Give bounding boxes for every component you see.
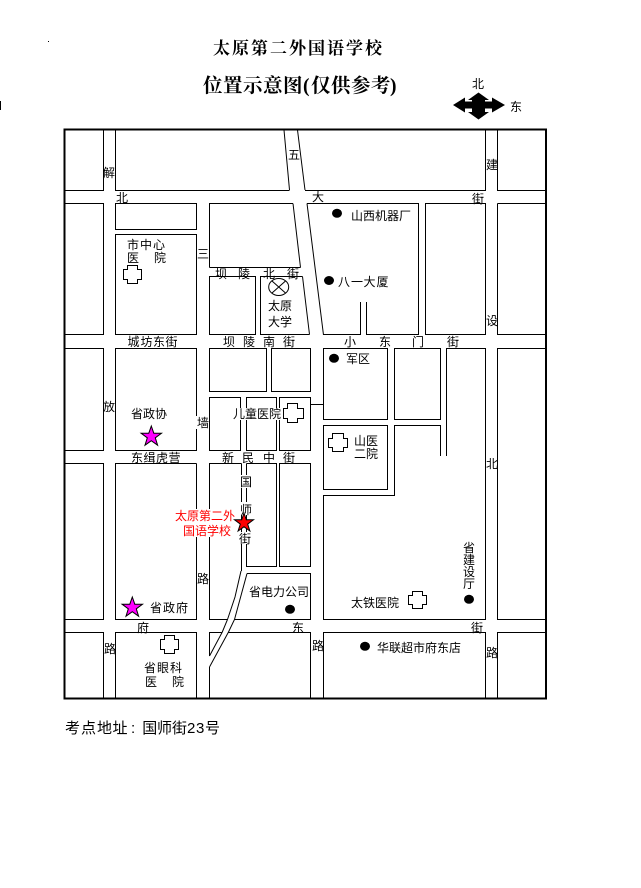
road labels: 坝陵北街 (215, 267, 299, 281)
road labels: 解 (103, 166, 115, 180)
icon: magenta star (122, 597, 142, 616)
destination: school marker: 太原第二外 (175, 508, 235, 523)
compass arrows (453, 92, 505, 120)
landmark: military region: 军区 (346, 352, 370, 366)
icon: hospital cross (328, 434, 348, 452)
landmark: city central hospital: 医院 (127, 251, 166, 265)
title: location map subtitle: 位置示意图(仅供参考) (203, 74, 396, 97)
road labels: 三 (197, 247, 209, 261)
road labels: 设 (486, 314, 498, 328)
landmark: provincial eye hospital: 省眼科 (144, 661, 182, 675)
road labels: 东缉虎营 (131, 451, 181, 465)
road labels: 街 (471, 621, 483, 635)
road labels: 街 (472, 192, 484, 206)
landmark: provincial eye hospital: 医院 (145, 675, 184, 689)
road labels: 路 (104, 641, 116, 656)
road labels: 府 (137, 620, 149, 635)
landmark: Taiyuan railway hospital: 太铁医院 (351, 595, 399, 610)
road labels: 大 (312, 190, 324, 204)
landmark: provincial government: 省政府 (150, 600, 188, 615)
landmark: children's hospital: 儿童医院 (233, 406, 281, 421)
landmark: children's hospital (233, 404, 304, 422)
landmark: military region (329, 352, 370, 366)
label masks over road lines (174, 247, 308, 598)
landmark: provincial government (122, 597, 188, 616)
road labels: 路 (197, 571, 209, 586)
landmark: provincial electric power company: 省电力公司 (249, 585, 309, 599)
road labels: 小东门街 (344, 334, 459, 349)
landmark: provincial CPPCC: 省政协 (131, 406, 167, 421)
landmark: Taiyuan University (268, 278, 292, 329)
icon: hospital cross (284, 404, 304, 422)
road labels: 街 (239, 532, 251, 546)
landmark: Shanxi machinery factory: 山西机器厂 (351, 209, 411, 223)
road labels: 放 (103, 399, 115, 414)
compass east label: 东 (510, 100, 522, 114)
icon: magenta star (141, 426, 162, 445)
road labels: 国 (240, 475, 252, 489)
landmark: Bayi building: 八一大厦 (338, 275, 389, 289)
landmark: Shanxi Medical No. 2 hospital: 山医 (354, 434, 378, 448)
landmark: provincial construction department: 省 (463, 541, 475, 555)
landmark: provincial construction department: 厅 (463, 577, 475, 591)
landmark: Taiyuan railway hospital (351, 592, 426, 610)
road labels: 坝陵南街 (223, 334, 295, 349)
road labels: 北 (486, 457, 498, 471)
compass north label: 北 (472, 77, 484, 91)
road labels: 城坊东街 (128, 334, 178, 349)
landmark: Hualian supermarket: 华联超市府东店 (377, 640, 461, 655)
landmark: city central hospital: 市中心 (127, 237, 165, 252)
destination: school marker (175, 508, 254, 538)
title: school name: 太原第二外国语学校 (213, 38, 384, 58)
landmark: Shanxi Medical No. 2 hospital: 二院 (354, 447, 378, 461)
road labels: 师 (240, 503, 252, 517)
footer: exam site address: 考点地址:国师街23号 (65, 720, 220, 737)
landmark: city central hospital (124, 237, 166, 284)
icon: red star (234, 513, 254, 531)
road labels (103, 148, 498, 660)
road labels: 路 (312, 638, 324, 653)
road labels: 东 (292, 621, 304, 635)
icon: hospital cross (408, 592, 426, 608)
compass (453, 77, 522, 120)
icon: crossed circle (269, 278, 289, 296)
landmark: provincial construction department (463, 541, 475, 604)
landmark: Taiyuan University: 大学 (268, 314, 292, 329)
street map (64, 130, 546, 698)
landmark: provincial construction department: 设 (463, 565, 475, 579)
angled roads (210, 130, 324, 667)
landmark: provincial electric power company (249, 585, 309, 614)
landmark: provincial construction department: 建 (463, 553, 475, 567)
landmark: provincial CPPCC (131, 406, 167, 445)
landmark: Shanxi Medical No. 2 hospital (328, 434, 378, 461)
road labels: 新民中街 (222, 450, 295, 465)
city blocks and road edges (65, 130, 545, 698)
landmark: Taiyuan University: 太原 (268, 298, 292, 313)
road labels: 建 (486, 158, 498, 172)
road labels: 北 (116, 191, 128, 205)
road labels: 墙 (197, 416, 209, 430)
icon: hospital cross (124, 266, 142, 284)
map frame (64, 130, 546, 698)
road labels: 五 (288, 148, 300, 162)
landmark: provincial eye hospital (144, 636, 184, 689)
icon: hospital cross (160, 636, 178, 654)
road labels: 路 (486, 645, 498, 660)
destination: school marker: 国语学校 (183, 523, 231, 538)
